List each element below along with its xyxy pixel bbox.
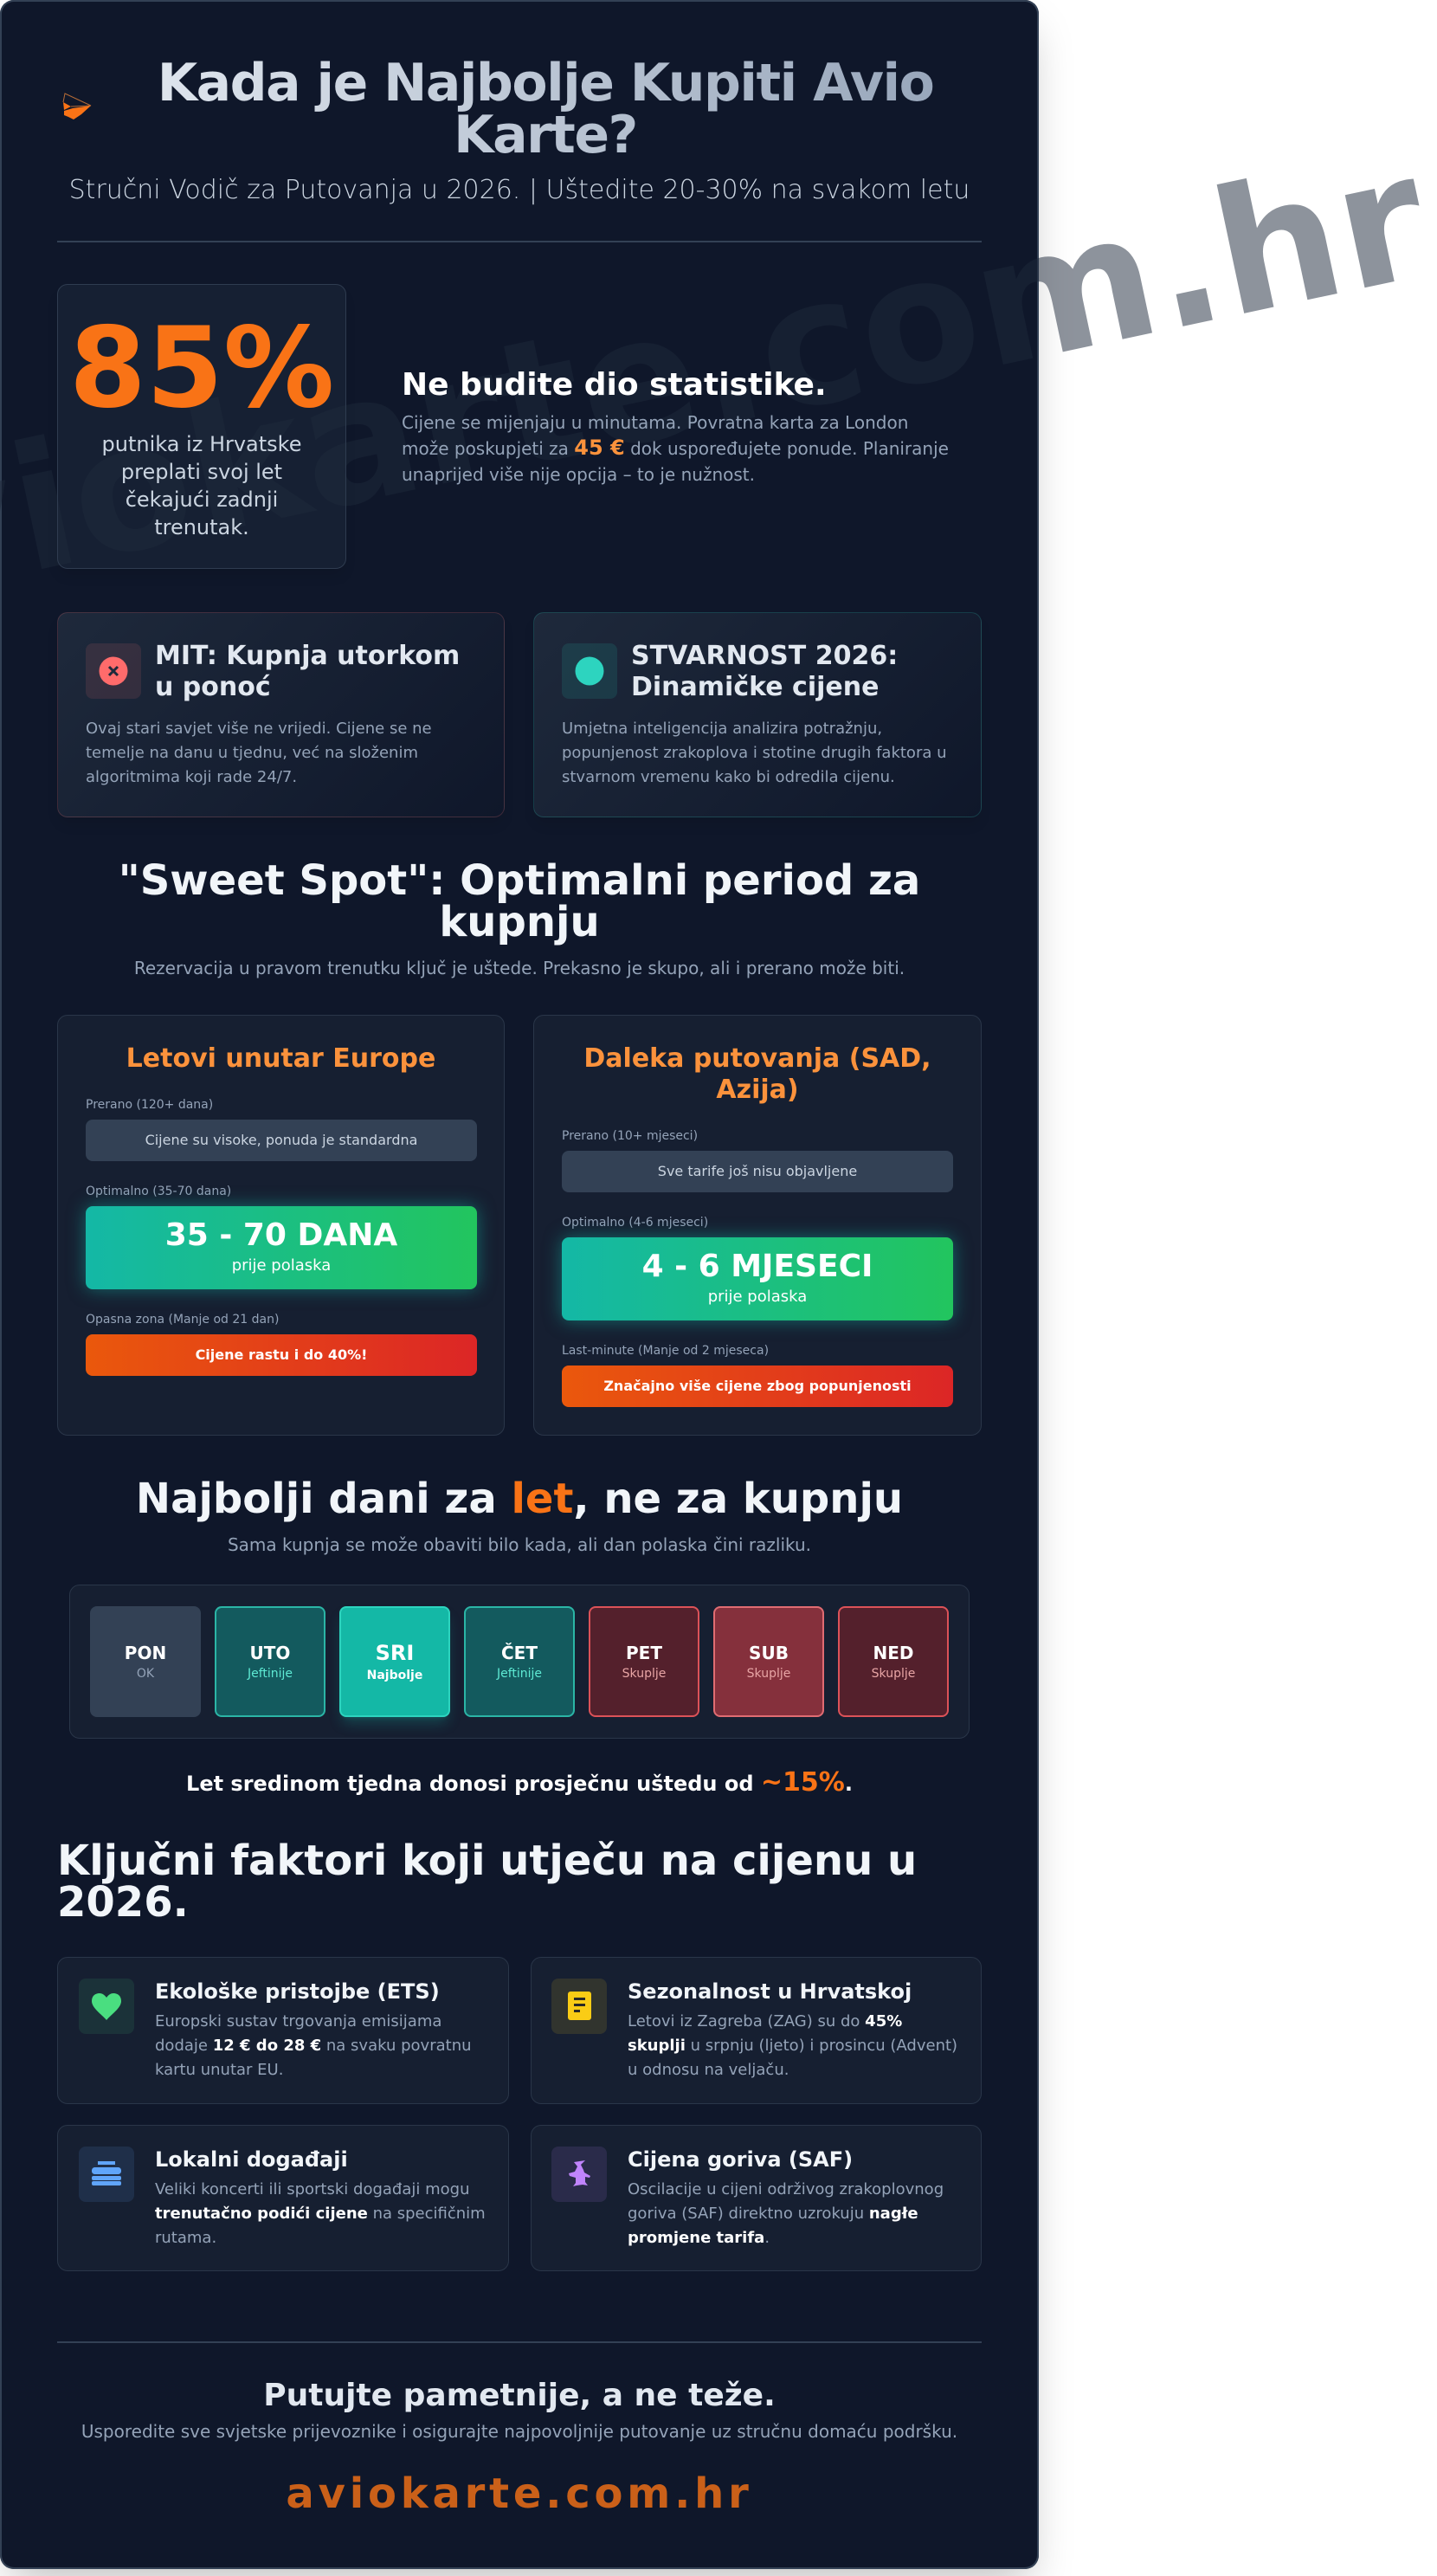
reality text: Umjetna inteligencija analizira potražnju, <box>562 720 882 738</box>
factor text: skuplji u srpnju (ljeto) i prosincu (Advent) <box>628 2037 957 2055</box>
statistic caption: putnika iz Hrvatske <box>102 432 301 456</box>
icon: stacked bars <box>79 2147 134 2202</box>
day: wednesday: SRI <box>376 1641 414 1665</box>
panel: seasonality <box>531 1957 982 2104</box>
footer brand: aviokarte.com.hr <box>286 2469 753 2518</box>
label: Optimalno (4-6 mjeseci) <box>562 1216 708 1230</box>
myth text: temelje na danu u tjednu, već na složenim <box>86 744 418 762</box>
statistic caption: čekajući zadnji <box>126 487 278 512</box>
factor heading: Lokalni događaji <box>155 2147 348 2172</box>
day: tuesday: Jeftinije <box>248 1667 293 1681</box>
factor heading: Ekološke pristojbe (ETS) <box>155 1979 440 2004</box>
bar: too early: Sve tarife još nisu objavljene <box>658 1163 857 1179</box>
panel: fuel price <box>531 2125 982 2271</box>
factor text: Europski sustav trgovanja emisijama <box>155 2012 441 2030</box>
panel: reality <box>533 612 982 817</box>
bar: danger <box>86 1334 477 1376</box>
myth text: algoritmima koji rade 24/7. <box>86 768 297 786</box>
factor heading: Cijena goriva (SAF) <box>628 2147 853 2172</box>
icon: cross <box>86 643 141 699</box>
heading: best days: Najbolji dani za let, ne za kupnju <box>136 1475 903 1523</box>
factor text: u odnosu na veljaču. <box>628 2061 789 2079</box>
bar: too early <box>86 1120 477 1161</box>
day: wednesday <box>339 1606 450 1717</box>
panel: ETS fees <box>57 1957 509 2104</box>
bar: danger: Cijene rastu i do 40%! <box>196 1346 367 1363</box>
heading: key factors: 2026. <box>57 1878 189 1927</box>
bar: optimal <box>562 1237 953 1320</box>
day: thursday: ČET <box>501 1643 538 1663</box>
heading: Ne budite dio statistike. <box>402 367 827 403</box>
bar: optimal: 35 - 70 DANA <box>165 1217 397 1253</box>
paragraph: Cijene se mijenjaju u minutama. Povratna karta za London <box>402 412 908 433</box>
chart: days of week <box>69 1585 970 1739</box>
factor text <box>628 2180 944 2247</box>
reality heading: Dinamičke cijene <box>631 672 879 702</box>
factor text <box>155 2012 472 2079</box>
label: Opasna zona (Manje od 21 dan) <box>86 1313 279 1327</box>
text: sweet spot intro: Rezervacija u pravom trenutku ključ je uštede. Prekasno je skupo, ali i prerano može biti. <box>134 958 905 978</box>
statistic caption: trenutak. <box>154 515 249 539</box>
reality text: popunjenost zrakoplova i stotine drugih faktora u <box>562 744 947 762</box>
factor text: promjene tarifa. <box>628 2229 770 2247</box>
bar: optimal: prije polaska <box>708 1288 807 1306</box>
day: wednesday: Najbolje <box>367 1669 422 1682</box>
factor text: kartu unutar EU. <box>155 2061 283 2079</box>
paragraph: unaprijed više nije opcija – to je nužnost. <box>402 464 755 485</box>
factor text <box>628 2012 957 2079</box>
factor text <box>155 2180 486 2247</box>
icon: heart <box>79 1979 134 2034</box>
day: sunday: Skuplje <box>872 1667 915 1681</box>
myth text <box>86 720 432 786</box>
footer heading: Putujte pametnije, a ne teže. <box>263 2378 776 2413</box>
day: friday <box>589 1606 699 1717</box>
factor text: goriva (SAF) direktno uzrokuju nagłe <box>628 2205 918 2223</box>
footer <box>81 2378 957 2518</box>
icon: purple figure <box>551 2147 607 2202</box>
panel: infographic card <box>0 0 1039 2569</box>
factor text: Letovi iz Zagreba (ZAG) su do 45% <box>628 2012 902 2030</box>
day: tuesday <box>215 1606 325 1717</box>
day: thursday: Jeftinije <box>497 1667 542 1681</box>
heading: sweet spot: kupnju <box>439 898 600 946</box>
heading: sweet spot <box>119 856 920 946</box>
day: saturday: SUB <box>749 1643 789 1663</box>
bar: optimal <box>86 1206 477 1289</box>
factor text: rutama. <box>155 2229 216 2247</box>
heading: key factors: Ključni faktori koji utječu na cijenu u <box>57 1837 917 1885</box>
label: Optimalno (35-70 dana) <box>86 1185 231 1198</box>
myth heading: MIT: Kupnja utorkom <box>155 641 460 671</box>
reality heading: STVARNOST 2026: <box>631 641 898 671</box>
panel heading: Letovi unutar Europe <box>126 1043 435 1074</box>
myth heading <box>155 641 460 702</box>
title <box>109 57 982 161</box>
bar: last minute: Značajno više cijene zbog popunjenosti <box>603 1378 912 1394</box>
day: saturday: Skuplje <box>747 1667 790 1681</box>
day: sunday <box>838 1606 949 1717</box>
subtitle: Stručni Vodič za Putovanja u 2026. | Uštedite 20-30% na svakom letu <box>69 175 970 205</box>
label: Prerano (10+ mjeseci) <box>562 1129 698 1143</box>
day: friday: PET <box>626 1643 662 1663</box>
icon: document <box>551 1979 607 2034</box>
callout: midweek saving: Let sredinom tjedna donosi prosječnu uštedu od ~15%. <box>186 1767 853 1798</box>
heading: key factors <box>57 1837 917 1927</box>
bar: too early <box>562 1151 953 1192</box>
statistic caption <box>102 432 301 539</box>
panel: myth <box>57 612 505 817</box>
day: tuesday: UTO <box>250 1643 290 1663</box>
panel: 85% statistic <box>57 284 346 569</box>
myth heading: u ponoć <box>155 672 271 702</box>
factor text: dodaje 12 € do 28 € na svaku povratnu <box>155 2037 472 2055</box>
factor heading: Sezonalnost u Hrvatskoj <box>628 1979 912 2004</box>
panel heading: Azija) <box>716 1075 799 1105</box>
heading: sweet spot: "Sweet Spot": Optimalni period za <box>119 856 920 905</box>
bar: optimal: prije polaska <box>232 1256 331 1275</box>
text: best days intro: Sama kupnja se može obaviti bilo kada, ali dan polaska čini razliku. <box>228 1534 811 1555</box>
footer text: Usporedite sve svjetske prijevoznike i osigurajte najpovoljnije putovanje uz stručnu domaću podršku. <box>81 2421 957 2442</box>
reality text <box>562 720 947 786</box>
reality heading <box>631 641 898 702</box>
panel: local events <box>57 2125 509 2271</box>
header <box>62 53 970 205</box>
icon: paper plane <box>62 93 92 119</box>
factor text: Veliki koncerti ili sportski događaji mogu <box>155 2180 469 2198</box>
day: friday: Skuplje <box>622 1667 666 1681</box>
panel: long haul flights <box>533 1015 982 1436</box>
label: Last-minute (Manje od 2 mjeseca) <box>562 1344 769 1358</box>
title: Karte? <box>454 105 637 165</box>
big number: 85% <box>69 304 334 433</box>
label: Prerano (120+ dana) <box>86 1098 213 1112</box>
day: monday: OK <box>137 1667 154 1681</box>
icon: circle <box>562 643 617 699</box>
day: saturday <box>713 1606 824 1717</box>
panel heading <box>583 1043 931 1105</box>
reality text: stvarnom vremenu kako bi odredila cijenu. <box>562 768 895 786</box>
title: Kada je Najbolje Kupiti Avio <box>158 53 933 113</box>
factor text: Oscilacije u cijeni održivog zrakoplovnog <box>628 2180 944 2198</box>
day: thursday <box>464 1606 575 1717</box>
paragraph: može poskupjeti za 45 € dok uspoređujete ponude. Planiranje <box>402 436 949 460</box>
panel: europe flights <box>57 1015 505 1436</box>
factor text: trenutačno podići cijene na specifičnim <box>155 2205 486 2223</box>
statistic caption: preplati svoj let <box>121 460 282 484</box>
bar: too early: Cijene su visoke, ponuda je standardna <box>145 1132 417 1148</box>
bar: last minute <box>562 1365 953 1407</box>
day: sunday: NED <box>873 1643 914 1663</box>
bar: optimal: 4 - 6 MJESECI <box>642 1249 873 1284</box>
panel heading: Daleka putovanja (SAD, <box>583 1043 931 1074</box>
text block: statistic explanation <box>402 367 949 485</box>
day: monday: PON <box>125 1643 166 1663</box>
myth text: Ovaj stari savjet više ne vrijedi. Cijene se ne <box>86 720 432 738</box>
paragraph <box>402 412 949 485</box>
day: monday <box>90 1606 201 1717</box>
